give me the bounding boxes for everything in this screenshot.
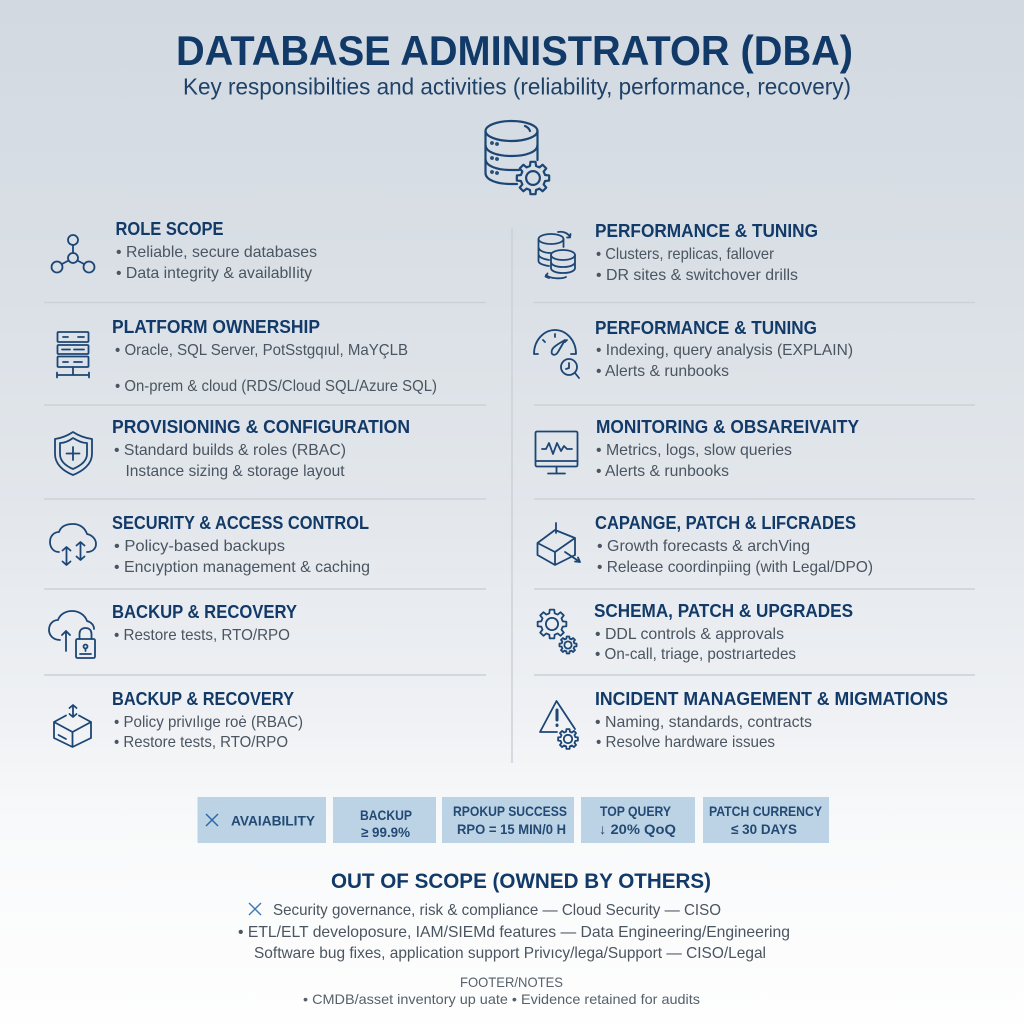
KPI: backup success: RPOKUP SUCCESS <box>453 803 567 819</box>
icon: cloud with lock <box>49 611 95 658</box>
KPI: top query <box>581 797 695 843</box>
icon: box with arrow <box>54 705 91 747</box>
KPI: patch currency <box>703 797 829 843</box>
panel: performance and tuning 2 <box>534 318 853 380</box>
KPI: backup <box>333 797 436 843</box>
KPI strip <box>198 797 829 843</box>
footer notes: • CMDB/asset inventory up uate • Evidence retained for audits <box>303 991 700 1007</box>
bullets <box>114 442 346 480</box>
bullets: • Release coordinpiing (with Legal/DPO) <box>597 559 873 576</box>
bullets: • Growth forecasts & archVing <box>597 538 810 555</box>
panel: backup and recovery 1 <box>49 602 297 658</box>
panel: monitoring and observability <box>536 417 859 480</box>
heading: BACKUP & RECOVERY <box>112 689 294 709</box>
out of scope heading: OUT OF SCOPE (OWNED BY OTHERS) <box>331 870 711 893</box>
bullets: • DR sites & switchover drills <box>596 267 798 284</box>
panel: role scope <box>52 219 317 282</box>
panel: incident management <box>540 689 948 751</box>
title: DATABASE ADMINISTRATOR (DBA) <box>176 27 853 74</box>
bullets <box>114 538 370 576</box>
heading: INCIDENT MANAGEMENT & MIGMATIONS <box>595 689 948 709</box>
icon: cross <box>249 903 261 915</box>
footer notes: FOOTER/NOTES <box>460 974 563 990</box>
footer notes <box>303 974 700 1007</box>
icon: database with gear <box>486 121 549 194</box>
bullets: • Alerts & runbooks <box>596 463 729 480</box>
bullets: • Restore tests, RTO/RPO <box>114 734 288 751</box>
bullets <box>596 342 853 380</box>
out of scope list <box>238 902 790 962</box>
bullets: • Indexing, query analysis (EXPLAIN) <box>596 342 853 359</box>
icon: package with arrow <box>538 523 580 565</box>
bullets: • On-call, triage, postrıartedes <box>595 646 796 663</box>
panel: platform ownership <box>57 317 437 395</box>
panel: schema, patch and upgrades <box>538 601 853 663</box>
heading: MONITORING & OBSAREIVAITY <box>596 417 859 437</box>
out of scope list: Software bug fixes, application support Privıcy/lega/Support — CISO/Legal <box>254 945 766 962</box>
panel: performance and tuning 1 <box>538 221 818 284</box>
bullets <box>115 342 437 395</box>
bullets: • DDL controls & approvals <box>595 626 784 643</box>
icon: gauge and magnifier <box>534 330 579 378</box>
icon: monitor with pulse <box>536 432 578 474</box>
heading: PERFORMANCE & TUNING <box>595 318 817 338</box>
bullets: • Encıyption management & caching <box>114 559 370 576</box>
heading: PLATFORM OWNERSHIP <box>112 317 320 337</box>
heading: SCHEMA, PATCH & UPGRADES <box>594 601 853 621</box>
heading: PERFORMANCE & TUNING <box>595 221 818 241</box>
panel: capacity, patch and upgrades <box>538 513 873 576</box>
out of scope list: Security governance, risk & compliance — Cloud Security — CISO <box>273 902 721 919</box>
bullets <box>116 244 317 282</box>
panel: provisioning and configuration <box>55 417 410 480</box>
right column dividers <box>512 228 975 763</box>
KPI: patch currency: ≤ 30 DAYS <box>731 821 797 837</box>
KPI: backup: BACKUP <box>360 807 412 823</box>
bullets: • Oracle, SQL Server, PotSstgqıul, MaYÇLB <box>115 342 408 359</box>
icon: server rack <box>57 332 89 378</box>
out of scope list: • ETL/ELT developosure, IAM/SIEMd features — Data Engineering/Engineering <box>238 924 790 941</box>
bullets: • Policy privılıge roė (RBAC) <box>114 714 303 731</box>
bullets: • Clusters, replicas, fallover <box>596 246 775 263</box>
bullets: • Alerts & runbooks <box>596 363 729 380</box>
left column dividers <box>44 302 486 675</box>
bullets <box>596 442 792 480</box>
bullets <box>596 246 798 284</box>
icon: replicated databases <box>538 232 575 278</box>
panel: backup and recovery 2 <box>54 689 303 751</box>
KPI: availability <box>198 797 326 843</box>
KPI: patch currency: PATCH CURRENCY <box>709 803 823 819</box>
icon: shield with plus <box>55 432 92 475</box>
bullets: • Metrics, logs, slow queries <box>596 442 792 459</box>
heading: CAPANGE, PATCH & LIFCRADES <box>595 513 856 533</box>
bullets: Instance sizing & storage layout <box>126 463 345 480</box>
heading: BACKUP & RECOVERY <box>112 602 297 622</box>
bullets: • On-prem & cloud (RDS/Cloud SQL/Azure SQL) <box>115 378 437 395</box>
bullets: • Data integrity & availablIity <box>116 265 312 282</box>
icon: cloud with arrows <box>50 524 96 565</box>
bullets: • Resolve hardware issues <box>596 734 775 751</box>
KPI: availability: AVAIABILITY <box>231 812 316 828</box>
KPI: backup success: RPO = 15 MIN/0 H <box>457 821 566 837</box>
heading: PROVISIONING & CONFIGURATION <box>112 417 410 437</box>
heading: ROLE SCOPE <box>116 219 224 239</box>
bullets <box>595 626 796 663</box>
subtitle: Key responsibilties and activities (reliability, performance, recovery) <box>183 74 851 100</box>
icon: network nodes <box>52 235 94 272</box>
bullet: • Restore tests, RTO/RPO <box>114 627 290 644</box>
bullets: • Standard builds & roles (RBAC) <box>114 442 346 459</box>
bullets: • Policy-based backups <box>114 538 285 555</box>
bullets <box>114 714 303 751</box>
icon: gears <box>538 610 577 654</box>
KPI: backup success <box>442 797 574 843</box>
panel: security and access control <box>50 513 370 576</box>
heading: SECURITY & ACCESS CONTROL <box>112 513 369 533</box>
icon: warning with gear <box>540 701 578 749</box>
KPI: top query: ↓ 20% QoQ <box>599 821 676 837</box>
bullets: • Naming, standards, contracts <box>595 714 812 731</box>
bullets <box>597 538 873 576</box>
KPI: backup: ≥ 99.9% <box>361 824 411 840</box>
KPI: top query: TOP QUERY <box>600 803 672 819</box>
bullets: • Reliable, secure databases <box>116 244 317 261</box>
bullets <box>595 714 812 751</box>
